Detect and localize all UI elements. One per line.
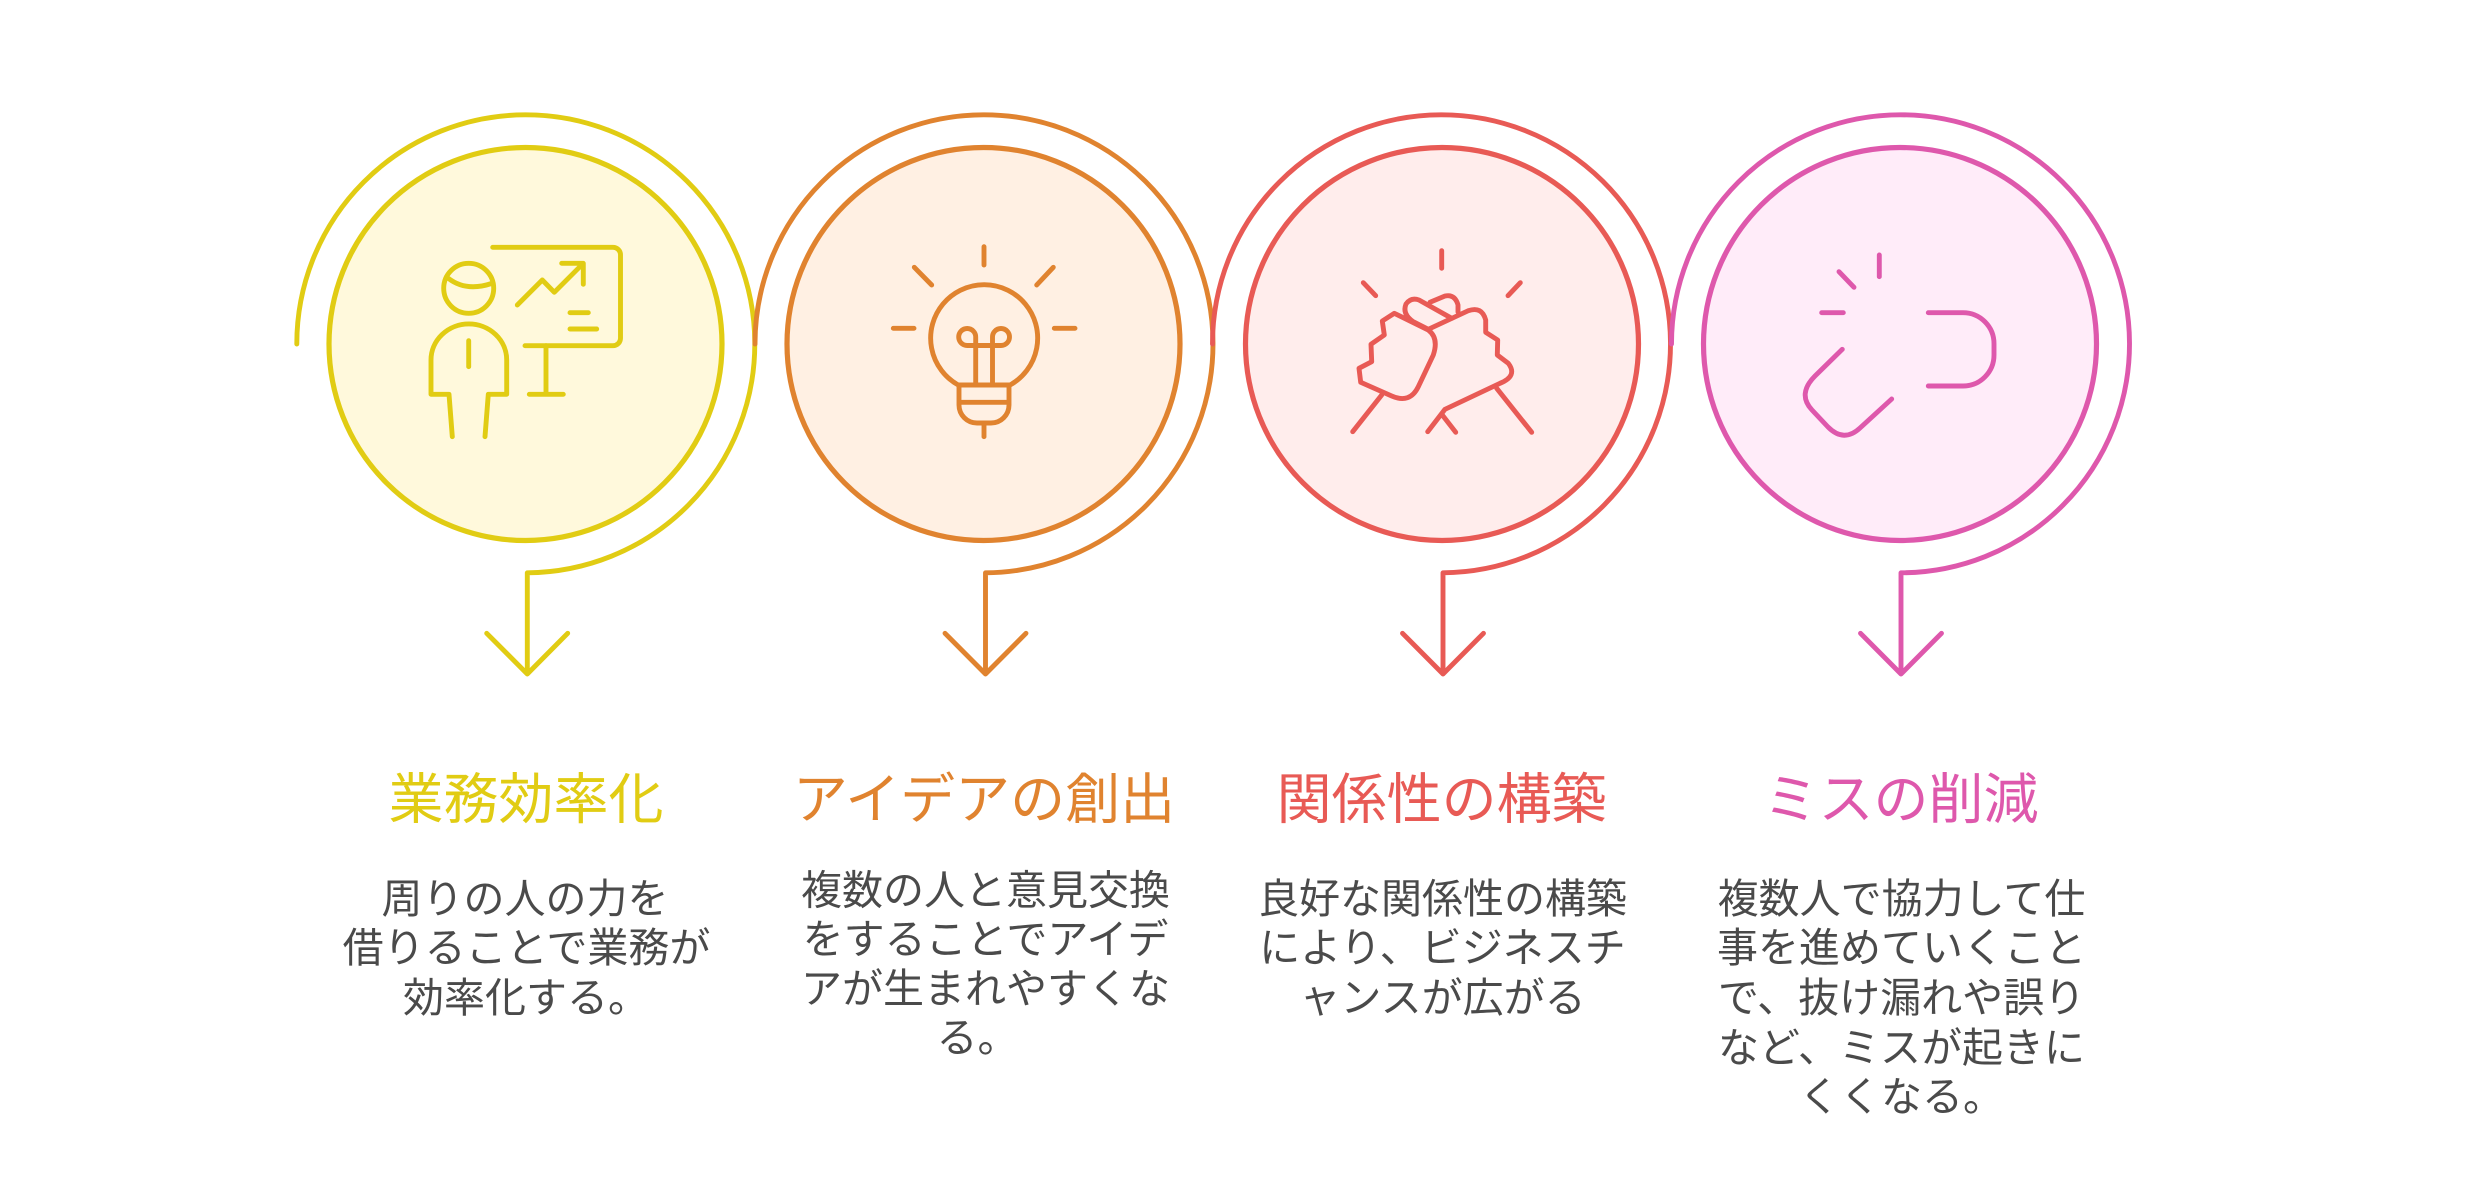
panel: ミスの削減	[1671, 115, 2129, 1120]
text: ミスの削減 description: など、ミスが起きに	[1718, 1025, 2085, 1071]
panel: アイデアの創出	[755, 115, 1213, 1061]
heading: アイデアの創出: アイデアの創出	[793, 768, 1175, 830]
circle: orange	[787, 148, 1180, 540]
icon: light bulb	[893, 247, 1075, 437]
text: 関係性の構築 description: 良好な関係性の構築	[1258, 876, 1627, 922]
text: 関係性の構築 description: により、ビジネスチ	[1259, 925, 1626, 971]
text: ミスの削減 description: 複数人で協力して仕	[1718, 876, 2085, 922]
text: 業務効率化 description: 周りの人の力を	[382, 876, 668, 922]
panel: 関係性の構築	[1212, 115, 1670, 1021]
panel: 業務効率化	[297, 115, 755, 1021]
text: アイデアの創出 description: る。	[936, 1015, 1018, 1061]
text: 関係性の構築 description: ャンスが広がる	[1299, 975, 1586, 1021]
spiral arrow: orange	[755, 115, 1213, 674]
circle: red	[1246, 148, 1638, 540]
heading: 関係性の構築: 関係性の構築	[1277, 768, 1607, 830]
text: アイデアの創出 description: 複数の人と意見交換	[801, 868, 1170, 914]
spiral arrow: yellow	[297, 115, 755, 674]
spiral arrow: pink	[1671, 115, 2129, 674]
heading: 業務効率化: 業務効率化	[388, 768, 664, 830]
icon: presenter with chart	[431, 247, 620, 437]
text: ミスの削減 description: で、抜け漏れや誤り	[1718, 975, 2085, 1021]
text: アイデアの創出 description: をすることでアイデ	[803, 916, 1168, 962]
text: 業務効率化 description: 効率化する。	[403, 975, 649, 1021]
text: アイデアの創出 description: アが生まれやすくな	[801, 966, 1170, 1012]
text: 業務効率化 description: 借りることで業務が	[343, 925, 710, 971]
text: ミスの削減 description: 事を進めていくこと	[1717, 925, 2086, 971]
heading: ミスの削減: ミスの削減	[1763, 768, 2039, 830]
icon: broken link	[1805, 255, 1994, 435]
circle: yellow	[329, 148, 722, 540]
text: ミスの削減 description: くくなる。	[1799, 1074, 2004, 1120]
icon: clasped hands	[1353, 251, 1532, 432]
spiral arrow: red	[1212, 115, 1670, 674]
circle: pink	[1704, 148, 2096, 540]
